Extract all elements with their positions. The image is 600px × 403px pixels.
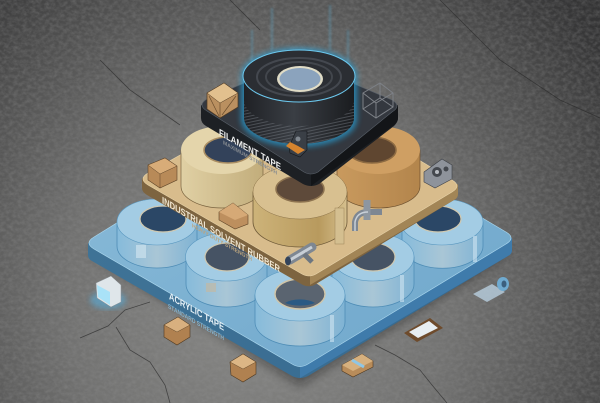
- icon: faucet pipe: [355, 200, 382, 231]
- black platform: [201, 60, 398, 186]
- label: industrial solvent rubber: [162, 196, 280, 276]
- roll: front: [255, 269, 345, 346]
- icon: wooden crate: [207, 83, 238, 118]
- roll: mid right: [332, 233, 414, 307]
- label: filament tape: FILAMENT TAPE: [219, 128, 281, 173]
- icon: cardboard box on tan tier: [148, 158, 177, 188]
- icon: floor box bottom: [230, 354, 256, 382]
- roll: front: [253, 165, 347, 247]
- filament tape coil: [243, 50, 355, 144]
- blue rolls: [117, 199, 483, 346]
- icon: steel pipe fitting: [285, 247, 312, 266]
- icon: glowing cube: [90, 276, 126, 309]
- icon: wire frame cube: [363, 83, 393, 118]
- label: acrylic tape: STANDARD STRENGTH: [168, 303, 224, 342]
- label: acrylic tape: ACRYLIC TAPE: [169, 291, 224, 334]
- roll: back right: [401, 199, 483, 268]
- tan platform: [142, 88, 458, 286]
- icon: taped parcel: [342, 354, 373, 377]
- roll: mid left: [186, 233, 267, 307]
- roll: right: [336, 126, 420, 208]
- label: industrial solvent rubber: HEAVY DUTY STRENGTH: [192, 223, 252, 263]
- energy beams above coil: [252, 5, 348, 62]
- icon: machine gearbox: [424, 159, 452, 188]
- blue platform: [88, 110, 512, 378]
- icon: forklift: [286, 131, 307, 157]
- panel: filament tape tier: [201, 5, 398, 186]
- icon: floor box left: [164, 317, 190, 345]
- coil glow: [241, 48, 357, 147]
- tan rolls: [181, 126, 420, 247]
- shadow under stack: [84, 250, 516, 386]
- roll: back left: [117, 199, 197, 268]
- icon: clipboard: [404, 318, 443, 342]
- label: industrial solvent rubber: INDUSTRIAL SOLVENT RUBBER: [162, 196, 280, 276]
- panel: industrial solvent rubber tier: [142, 88, 458, 286]
- icon: tape dispenser: [473, 277, 509, 302]
- roll: left: [181, 126, 263, 208]
- label: filament tape: MAXIMUM STRENGTH: [223, 140, 277, 177]
- panel: acrylic tape tier: [88, 110, 512, 378]
- icon: rounded crate on tan tier: [219, 203, 248, 229]
